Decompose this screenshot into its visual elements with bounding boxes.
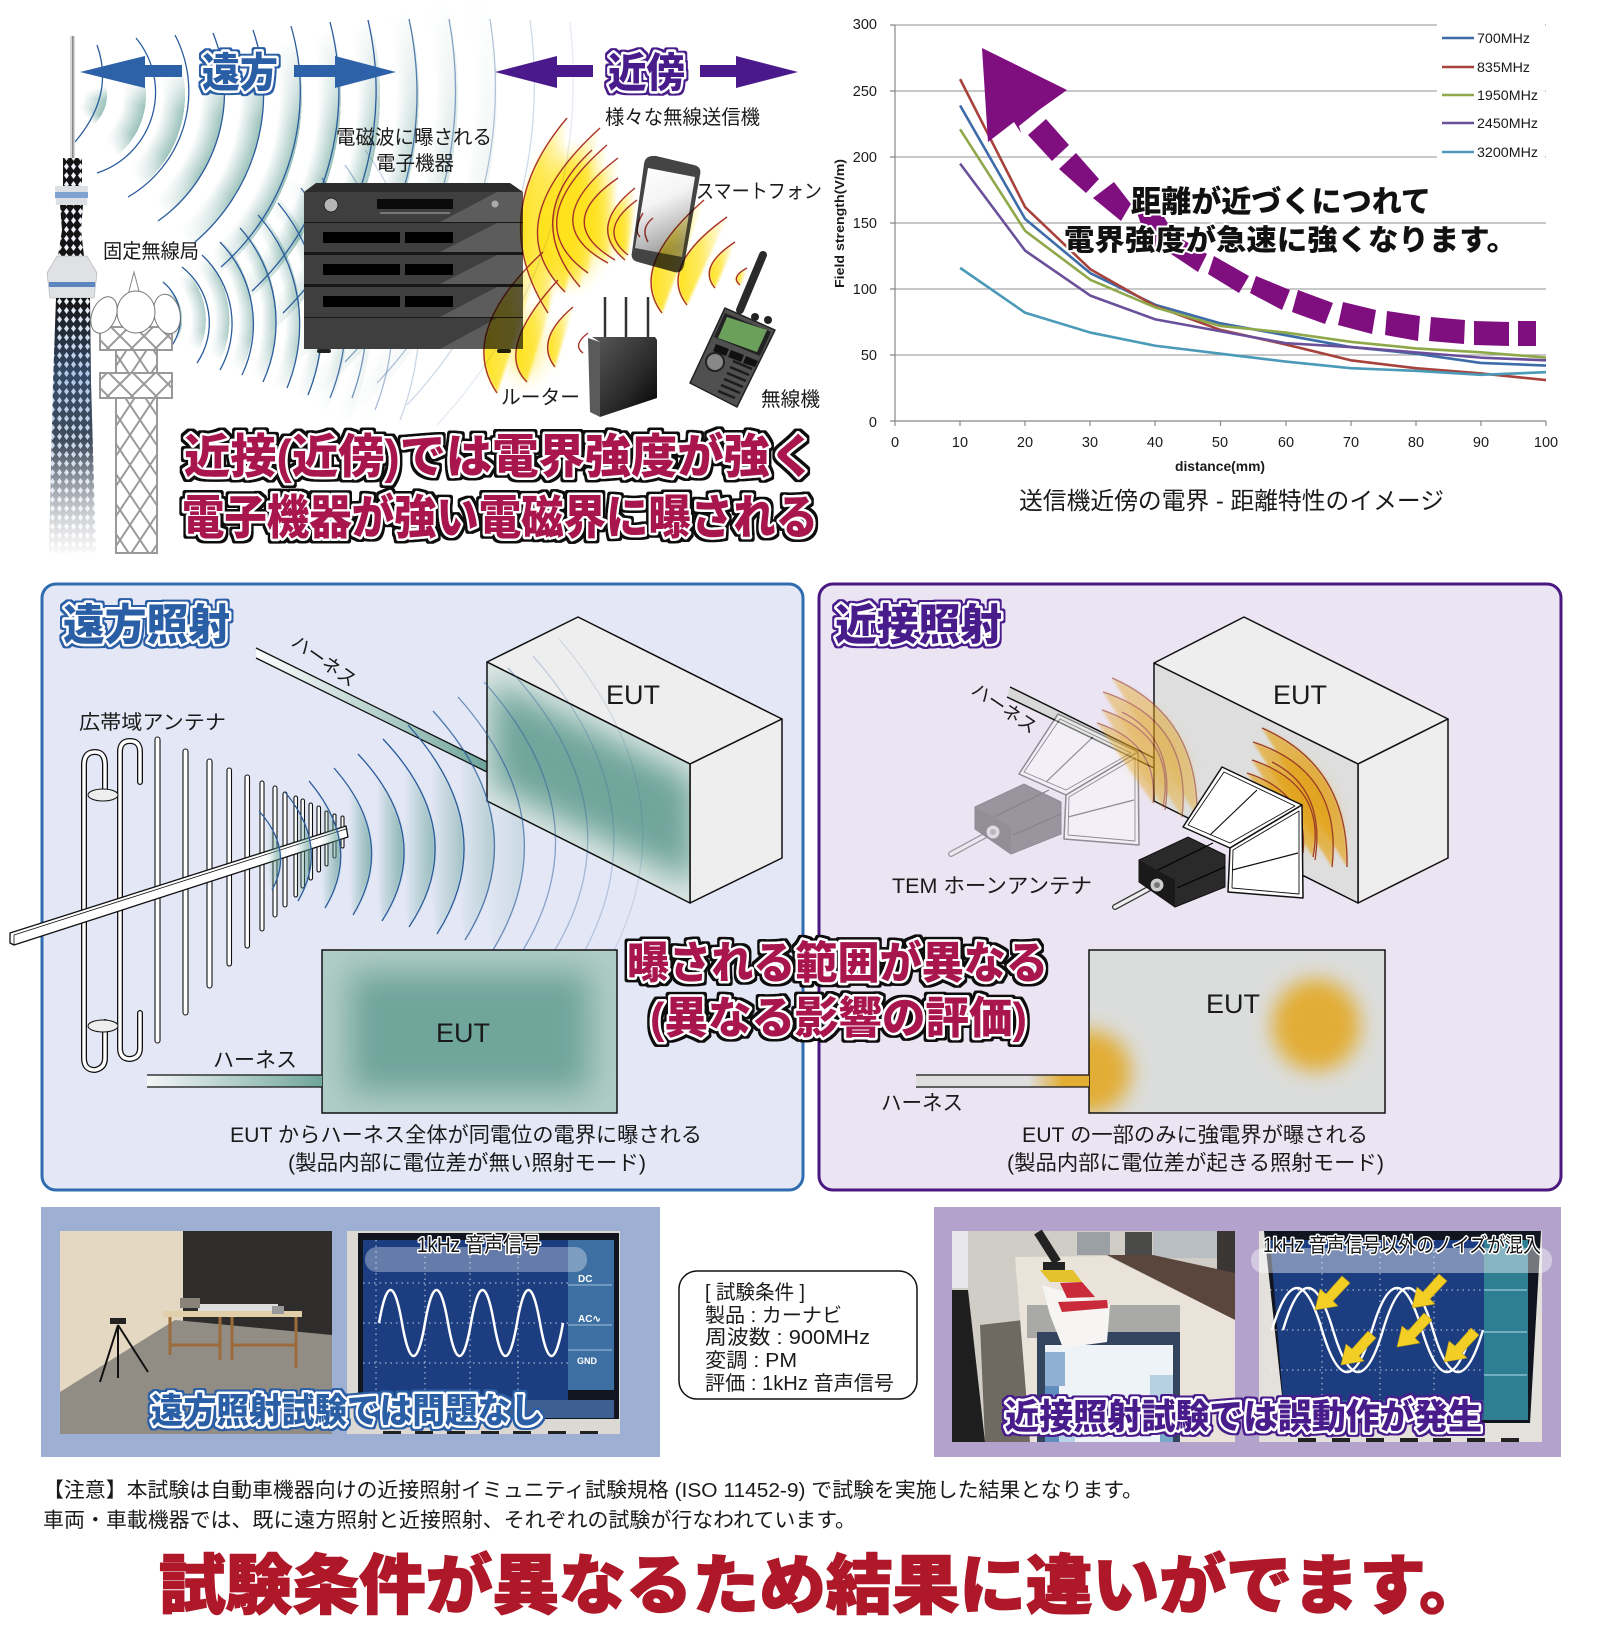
callout: different exposure ranges: [627, 938, 1048, 1043]
icons: yellow noise arrows: [1315, 1274, 1479, 1365]
y-axis labels: 100: [853, 282, 877, 298]
harness horizontal orange: [916, 1075, 1089, 1087]
panel: far field test result: [41, 1207, 660, 1457]
callout: different exposure ranges: 曝される範囲が異なる: [627, 938, 1048, 988]
panel: near field irradiation: [819, 584, 1561, 1190]
icon: smartphone: [632, 156, 700, 272]
label: harness lower: ハーネス: [213, 1049, 297, 1072]
icon: log periodic antenna: [10, 737, 348, 1070]
y-axis labels: 300: [853, 17, 877, 33]
chart caption: 送信機近傍の電界 - 距離特性のイメージ: [1019, 488, 1444, 515]
label pill: 1kHz: 1kHz 音声信号: [417, 1234, 541, 1257]
panel: test conditions: 周波数 : 900MHz: [705, 1326, 870, 1349]
callout: different exposure ranges: (異なる影響の評価): [650, 994, 1027, 1043]
label: harness top: ハーネス: [287, 632, 360, 692]
y-axis labels: 50: [861, 348, 877, 364]
y-axis title: Field strength(V/m): [832, 159, 847, 288]
data series: [960, 79, 1546, 380]
conclusion headline: 試験条件が異なるため結果に違いがでます。: [159, 1549, 1486, 1622]
waves: near field yellow: [484, 118, 747, 393]
x-axis labels: 50: [1212, 435, 1228, 451]
x-axis labels: 20: [1017, 435, 1033, 451]
chart annotation: 電界強度が急速に強くなります。: [1064, 223, 1517, 257]
waves: ghost horn: [1097, 678, 1197, 817]
caption: far field: [230, 1124, 702, 1175]
x-axis labels: [891, 435, 1558, 451]
panel: test conditions: [679, 1271, 917, 1399]
label: 電磁波に曝される: 電磁波に曝される: [336, 126, 492, 149]
chart annotation: [1064, 185, 1517, 257]
photo: oscilloscope normal: DC: [578, 1274, 592, 1285]
panel: test conditions: 評価 : 1kHz 音声信号: [705, 1372, 894, 1395]
caption: near field: (製品内部に電位差が起きる照射モード): [1007, 1152, 1384, 1175]
line chart: field strength vs distance: [832, 17, 1558, 515]
label: 様々な無線送信機: 様々な無線送信機: [605, 106, 760, 129]
x-axis labels: 60: [1278, 435, 1294, 451]
arrow: near field purple left: [495, 56, 593, 88]
callout: near field strength: 近接(近傍)では電界強度が強く: [184, 430, 816, 483]
label pill: noise: 1kHz 音声信号以外のノイズが混入: [1263, 1234, 1541, 1257]
note text: 【注意】本試験は自動車機器向けの近接照射イミュニティ試験規格 (ISO 11452-9) で試験を実施した結果となります。: [43, 1479, 1143, 1502]
label: スマートフォン: スマートフォン: [696, 181, 822, 203]
axes: [890, 25, 1546, 426]
x-axis labels: 80: [1408, 435, 1424, 451]
icon: router: [588, 297, 657, 417]
harness diagonal near: [1007, 687, 1154, 768]
EUT front view teal: EUT: [436, 1018, 490, 1048]
verdict: far field no problem: 遠方照射試験では問題なし: [151, 1392, 543, 1431]
grid lines: [895, 25, 1546, 355]
label pill: noise: [1251, 1234, 1552, 1273]
heading: 近接照射: 近接照射: [835, 602, 1002, 650]
arrow: near field purple right: [700, 56, 798, 88]
label: harness near: ハーネス: [967, 680, 1040, 739]
note text: 車両・車載機器では、既に遠方照射と近接照射、それぞれの試験が行なわれています。: [43, 1509, 856, 1532]
verdict: near field malfunction: 近接照射試験では誤動作が発生: [1005, 1397, 1482, 1437]
photo: oscilloscope normal: GND: [577, 1356, 598, 1366]
label: TEM horn antenna: TEM ホーンアンテナ: [892, 875, 1092, 898]
y-axis labels: 250: [853, 84, 877, 100]
y-axis labels: 200: [853, 150, 877, 166]
label: ルーター: ルーター: [501, 386, 580, 409]
heading: 遠方照射: 遠方照射: [63, 602, 230, 650]
photo: test room: [60, 1231, 332, 1434]
legend: [1437, 20, 1545, 165]
waves: antenna radiation lines: [259, 639, 643, 974]
wave fill: tower teal gradient: [83, 27, 497, 380]
wave lines from broadcast tower: [75, 19, 573, 425]
EUT box 3D: [487, 617, 782, 903]
EUT front view teal: [322, 950, 617, 1113]
x-axis labels: 40: [1147, 435, 1163, 451]
caption: near field: EUT の一部のみに強電界が曝される: [1022, 1124, 1368, 1147]
x-axis labels: 0: [891, 435, 899, 451]
label: 無線機: 無線機: [761, 388, 820, 411]
caption: near field: [1007, 1124, 1384, 1175]
wave lines from fixed radio station: [163, 150, 419, 420]
panel: test conditions: 製品 : カーナビ: [705, 1304, 842, 1327]
icon: fixed radio station: [86, 272, 184, 553]
y-axis labels: [853, 17, 877, 431]
label pill: 1kHz: [365, 1234, 587, 1272]
panel: far field irradiation: [10, 584, 803, 1190]
EUT box 3D near: EUT: [1273, 680, 1327, 710]
caption: far field: (製品内部に電位差が無い照射モード): [288, 1152, 646, 1175]
legend: 700MHz: [1477, 30, 1530, 46]
waves: antenna radiation fill: [259, 697, 524, 950]
waves: horn: [1247, 728, 1347, 867]
caption: far field: EUT からハーネス全体が同電位の電界に曝される: [230, 1124, 702, 1147]
legend: 3200MHz: [1477, 144, 1538, 160]
EUT front view orange: EUT: [1206, 989, 1260, 1019]
photo: oscilloscope normal: [347, 1231, 620, 1434]
callout: near field strength: 電子機器が強い電磁界に曝される: [182, 491, 818, 544]
y-axis labels: 0: [869, 415, 877, 431]
y-axis labels: 150: [853, 216, 877, 232]
label: 電子機器: 電子機器: [376, 152, 454, 175]
EUT front view orange: [1088, 949, 1386, 1114]
wave fill: station teal gradient: [167, 182, 369, 400]
x-axis labels: 10: [952, 435, 968, 451]
arrow: far field blue left: [80, 56, 182, 88]
icon: handheld radio: [690, 255, 775, 407]
x-axis title: distance(mm): [1175, 458, 1265, 474]
photo: near field test: [952, 1231, 1235, 1442]
harness horizontal teal: [147, 1075, 322, 1087]
EUT box 3D: EUT: [606, 680, 660, 710]
panel: test conditions: 変調 : PM: [705, 1349, 797, 1372]
label: harness lower near: ハーネス: [881, 1092, 963, 1115]
photo: oscilloscope normal: AC∿: [578, 1314, 601, 1325]
legend: 835MHz: [1477, 59, 1530, 75]
arrow: far field blue right: [294, 56, 396, 88]
heading: 遠方: 遠方: [202, 50, 278, 96]
legend: 1950MHz: [1477, 87, 1538, 103]
illustration: far and near field scene: [47, 19, 822, 553]
icon: electronic equipment stack: [304, 183, 523, 353]
label: broadband antenna: 広帯域アンテナ: [79, 711, 226, 734]
x-axis labels: 70: [1343, 435, 1359, 451]
arrow: purple dashed trend: [982, 48, 1536, 346]
legend: 2450MHz: [1477, 115, 1538, 131]
photo: oscilloscope with noise: [1259, 1231, 1542, 1442]
x-axis labels: 100: [1534, 435, 1558, 451]
note text: [43, 1479, 1143, 1532]
harness diagonal: [256, 648, 487, 772]
icon: TEM horn: [1115, 767, 1303, 907]
x-axis labels: 90: [1473, 435, 1489, 451]
label: 固定無線局: 固定無線局: [103, 240, 199, 263]
panel: test conditions: [ 試験条件 ]: [705, 1281, 805, 1304]
chart annotation: 距離が近づくにつれて: [1131, 185, 1431, 219]
callout: near field strength: [182, 430, 818, 544]
icon: sky tower: [47, 36, 97, 553]
EUT box 3D near: [1154, 617, 1448, 903]
x-axis labels: 30: [1082, 435, 1098, 451]
panel: near field test result: [934, 1207, 1561, 1457]
heading: 近傍: 近傍: [608, 50, 685, 96]
icon: TEM horn ghost: [951, 714, 1139, 854]
